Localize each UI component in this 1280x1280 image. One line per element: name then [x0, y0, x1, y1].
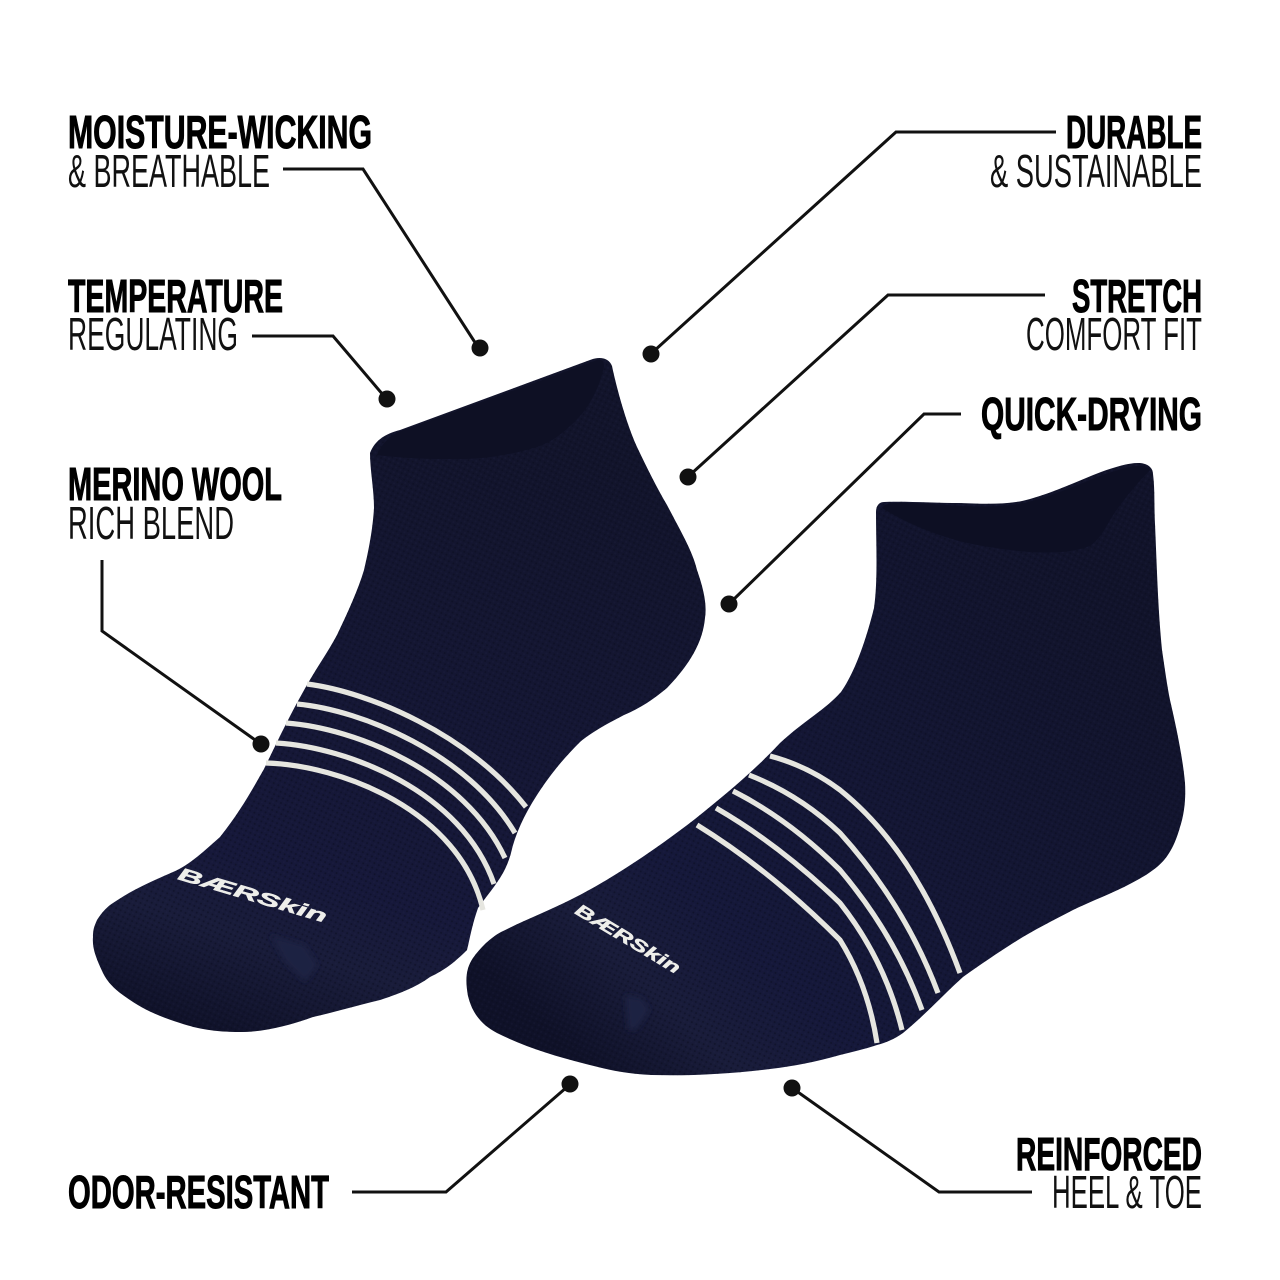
heading: ODOR-RESISTANT [68, 1166, 329, 1218]
callout: stretch [680, 270, 1202, 486]
callout: reinforced [784, 1080, 1202, 1218]
logo right: BÆRSkin [572, 900, 684, 978]
dot [720, 596, 738, 612]
callout: quick-drying [720, 388, 1202, 612]
subheading: REGULATING [68, 308, 238, 360]
sock: left [80, 340, 720, 1040]
callout: temperature [68, 270, 396, 408]
leader line [795, 1090, 1032, 1192]
heading: TEMPERATURE [68, 270, 283, 322]
subheading: RICH BLEND [68, 497, 234, 549]
leader line [691, 295, 1045, 474]
sock opening left [377, 360, 604, 459]
leader line [252, 336, 384, 396]
dot [642, 346, 660, 362]
leader line [102, 560, 258, 742]
stripes right [697, 756, 960, 1043]
stripes left [266, 684, 526, 910]
callout: odor-resistant [68, 1076, 578, 1218]
leader line [732, 414, 961, 601]
dot [562, 1076, 578, 1092]
dot [252, 736, 270, 752]
callout: durable [642, 106, 1202, 362]
subheading: & BREATHABLE [68, 145, 270, 197]
sock opening right [882, 466, 1150, 552]
callout: merino wool [68, 458, 282, 752]
toe seam right [625, 995, 650, 1030]
dot [784, 1080, 800, 1096]
callout: moisture-wicking [68, 106, 488, 356]
logo left: BÆRSkin [176, 864, 329, 927]
dot [378, 390, 396, 408]
toe seam left [270, 935, 318, 982]
dot [680, 468, 696, 486]
sock body right [466, 463, 1185, 1075]
dot [472, 340, 488, 356]
leader line [352, 1087, 567, 1192]
heading: MOISTURE-WICKING [68, 106, 372, 158]
leader line [283, 169, 476, 344]
leader line [654, 132, 1056, 351]
heading: MERINO WOOL [68, 458, 282, 510]
sock body left [93, 358, 706, 1032]
sock: right [460, 455, 1190, 1085]
